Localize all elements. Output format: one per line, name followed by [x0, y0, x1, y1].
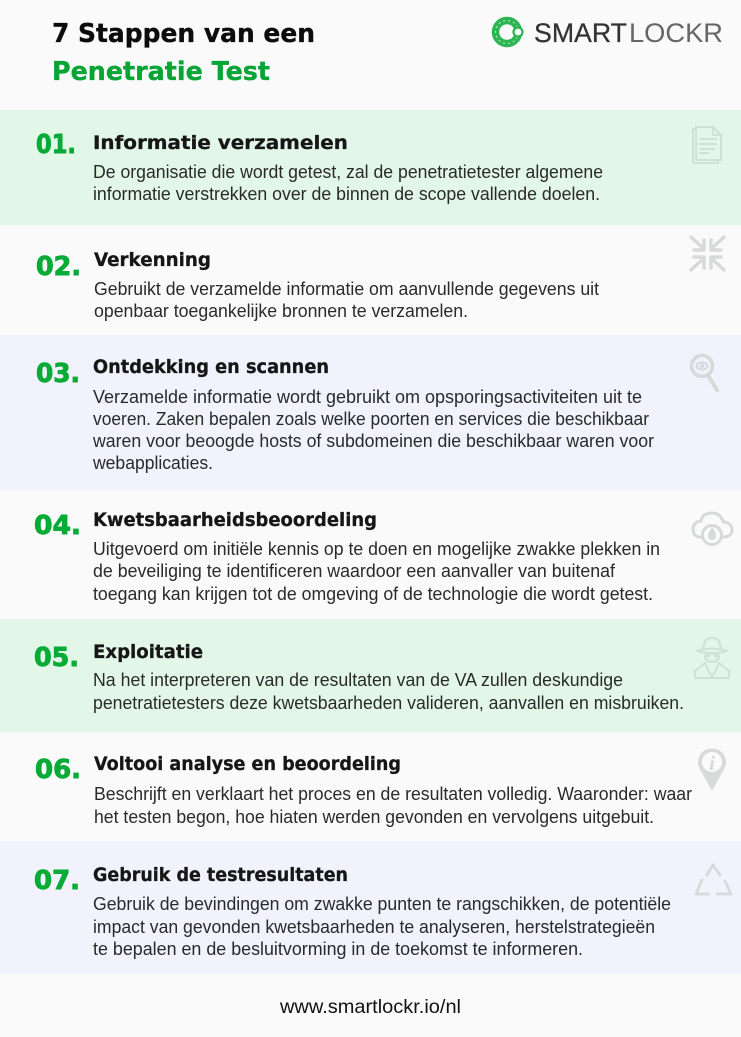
icon: recycle triangle	[696, 865, 731, 894]
panel: step 7: Gebruik de bevindingen om zwakke punten te rangschikken, de potentiële	[93, 894, 671, 914]
panel: step 3: Ontdekking en scannen	[93, 356, 329, 378]
panel: step 4: de beveiliging te identificeren waardoor een aanvaller van buitenaf	[93, 561, 616, 581]
logo: SmartLockr	[496, 18, 723, 48]
panel: step 4: Kwetsbaarheidsbeoordeling	[93, 509, 377, 531]
panel: step 7: te bepalen en de besluitvorming in de toekomst te informeren.	[93, 939, 583, 959]
panel: step 7: impact van gevonden kwetsbaarheden te analyseren, herstelstrategieën	[93, 917, 655, 937]
panel: step 6: Voltooi analyse en beoordeling	[94, 753, 401, 775]
panel: step 3: 03.	[36, 359, 80, 389]
panel: step 1: 01.	[36, 130, 76, 160]
panel: step 1: Informatie verzamelen	[93, 132, 348, 154]
logo: SmartLockr: LOCKR	[629, 18, 723, 48]
panel: step 5: 05.	[34, 643, 79, 673]
icon: magnifier with eye	[692, 356, 717, 390]
panel: step 2: openbaar toegankelijke bronnen te verzamelen.	[94, 301, 468, 321]
panel: step 2: Verkenning	[94, 249, 211, 271]
panel: step 7: 07.	[34, 866, 80, 896]
panel: step 7	[0, 841, 741, 973]
title: Penetratie Test	[52, 57, 270, 87]
panel: step 6	[0, 732, 741, 841]
panel: step 6: Beschrijft en verklaart het proces en de resultaten volledig. Waaronder: waar	[94, 784, 692, 804]
panel: step 2: 02.	[36, 252, 81, 282]
icon: info pin: i	[709, 751, 715, 775]
footer url: www.smartlockr.io/nl	[279, 996, 461, 1018]
panel: step 5: penetratietesters deze kwetsbaarheden valideren, aanvallen en misbruiken.	[93, 693, 684, 713]
panel: step 2: Gebruikt de verzamelde informatie om aanvullende gegevens uit	[94, 279, 599, 299]
icon: cloud with flame	[693, 513, 732, 544]
panel: step 6: 06.	[35, 755, 81, 785]
panel: step 3: webapplicaties.	[92, 453, 213, 473]
panel: step 1: informatie verstrekken over de binnen de scope vallende doelen.	[93, 184, 600, 204]
panel: step 3: waren voor beoogde hosts of subdomeinen die beschikbaar waren voor	[92, 431, 654, 451]
panel: step 3	[0, 335, 741, 490]
icon: compress arrows	[691, 237, 724, 270]
panel: step 1	[0, 110, 741, 225]
panel: step 1: De organisatie die wordt getest, zal de penetratietester algemene	[93, 162, 603, 182]
panel: step 3: Verzamelde informatie wordt gebruikt om opsporingsactiviteiten uit te	[93, 387, 642, 407]
panel: step 2	[0, 225, 741, 335]
icon: info pin	[698, 748, 726, 791]
logo: SmartLockr: SMART	[534, 18, 627, 48]
panel: step 5: Exploitatie	[93, 641, 203, 663]
panel: step 7: Gebruik de testresultaten	[93, 864, 348, 886]
title	[52, 19, 315, 87]
panel: step 5: Na het interpreteren van de resultaten van de VA zullen deskundige	[93, 670, 623, 690]
panel: step 4	[0, 490, 741, 619]
panel: step 4: Uitgevoerd om initiële kennis op te doen en mogelijke zwakke plekken in	[93, 539, 660, 559]
icon: spy	[695, 638, 729, 678]
panel: step 5	[0, 619, 741, 732]
panel: step 3: voeren. Zaken bepalen zoals welke poorten en services die beschikbaar	[93, 409, 649, 429]
panel: step 4: 04.	[34, 511, 81, 541]
panel: step 6: het testen begon, hoe hiaten werden gevonden en vervolgens uitgebuit.	[94, 807, 654, 827]
panel: step 4: toegang kan krijgen tot de omgeving of de technologie die wordt getest.	[93, 584, 653, 604]
title: 7 Stappen van een	[52, 19, 315, 49]
icon: document	[693, 127, 721, 163]
